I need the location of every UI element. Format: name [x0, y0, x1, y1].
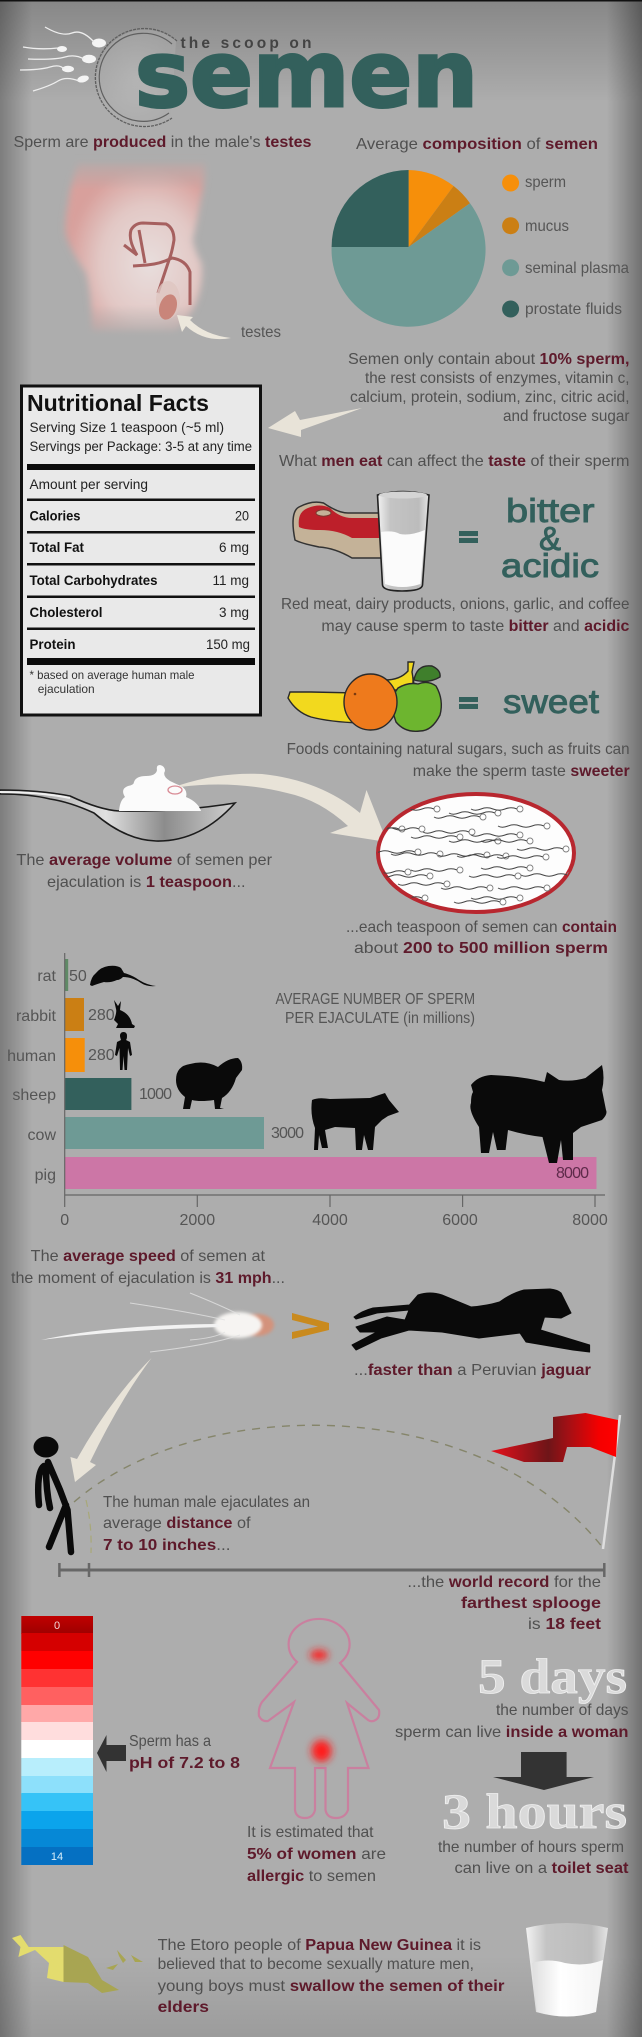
- spoon: [0, 790, 235, 841]
- value labels: 280: [88, 1007, 115, 1024]
- serving info: Servings per Package: 3-5 at any time: [30, 439, 252, 454]
- leaf: [414, 666, 440, 681]
- panel: nutrition facts: [22, 386, 260, 715]
- panel: nutrition facts: Amount per serving: [30, 477, 148, 492]
- row protein: 150 mg: [206, 637, 250, 652]
- pink sperm highlight: [168, 786, 182, 794]
- text: world record: farthest splooge: [461, 1595, 601, 1612]
- icon: red flag: [491, 1413, 620, 1549]
- pie legend: seminal plasma: [525, 260, 629, 277]
- nutrition title: Nutritional Facts: [27, 390, 209, 416]
- label: bitter and acidic: bitter: [506, 492, 594, 529]
- text: average speed: the moment of ejaculation is 31 mph...: [11, 1270, 285, 1287]
- text: semen only contains 10%: the rest consists of enzymes, vitamin c,: [365, 370, 630, 387]
- icon: rabbit: [114, 1000, 135, 1028]
- category labels: rabbit: [16, 1008, 57, 1025]
- row cholesterol: [30, 605, 249, 620]
- row cholesterol: 3 mg: [219, 605, 249, 620]
- text: semen only contains 10%: calcium, protein, sodium, zinc, citric acid,: [350, 389, 630, 406]
- icon: egg ring: [95, 29, 177, 127]
- orange: [344, 674, 397, 730]
- text: average speed: The average speed of semen at: [31, 1248, 266, 1265]
- icon: woman outline: [259, 1619, 379, 1818]
- text: 5% of women: allergic to semen: [247, 1868, 376, 1885]
- axis tick labels: 2000: [180, 1212, 215, 1229]
- pie legend: sperm: [525, 174, 566, 191]
- axis tick labels: 4000: [312, 1212, 348, 1229]
- text: 5% of women: 5% of women are: [247, 1846, 386, 1863]
- testis: [156, 292, 180, 322]
- row total fat: Total Fat: [30, 540, 84, 555]
- row protein: Protein: [30, 637, 76, 652]
- label: bitter and acidic: [501, 492, 599, 584]
- pH scale: [21, 1616, 93, 1865]
- value labels: 280: [88, 1047, 115, 1064]
- chart title: AVERAGE NUMBER OF SPERM: [276, 991, 475, 1008]
- arrow: spoon to lens: [180, 774, 387, 842]
- text: human male distance: [103, 1494, 310, 1554]
- scale end labels: 0: [54, 1620, 60, 1632]
- text: foods containing sugars: Foods containing natural sugars, such as fruits can: [287, 741, 630, 758]
- arrow down: [493, 1752, 594, 1790]
- body silhouette: [65, 162, 205, 332]
- scale end labels: [51, 1620, 63, 1863]
- label: sweet: sweet: [503, 683, 599, 720]
- text: average volume: ejaculation is 1 teaspoon...: [47, 874, 246, 891]
- title: the scoop on semen: [20, 21, 478, 128]
- trajectory arc: [74, 1425, 603, 1553]
- reproductive tubes: [124, 223, 190, 305]
- row calories: 20: [235, 508, 249, 524]
- stat: 5 days: the number of days: [496, 1702, 628, 1719]
- text: world record: is 18 feet: [528, 1616, 602, 1633]
- text: foods containing sugars: make the sperm taste sweeter: [413, 763, 630, 780]
- stat: 3 hours: [438, 1783, 629, 1877]
- text: semen only contains 10%: Semen only contain about 10% sperm,: [348, 351, 630, 368]
- text: average speed: [11, 1248, 285, 1287]
- icon: jaguar: [352, 1289, 590, 1352]
- scale end labels: 14: [51, 1851, 63, 1863]
- footnote: * based on average human male: [30, 668, 195, 682]
- text: average volume: The average volume of semen per: [16, 852, 273, 869]
- arrow: down to man: [70, 1358, 152, 1482]
- stat: 5 days: 5 days: [478, 1648, 627, 1704]
- axis tick labels: 6000: [442, 1212, 478, 1229]
- text: 5% of women: [247, 1824, 386, 1885]
- row calories: Calories: [30, 508, 80, 524]
- text: 5% of women: It is estimated that: [247, 1824, 374, 1841]
- text: pH of sperm: [129, 1733, 240, 1772]
- text: pH of sperm: pH of 7.2 to 8: [129, 1755, 240, 1772]
- text: Etoro people: believed that to become sexually mature men,: [158, 1956, 474, 1973]
- footnote: ejaculation: [38, 682, 95, 696]
- icon: swimming sperm: [20, 27, 106, 91]
- icon: stick man: [34, 1436, 71, 1552]
- footnote: [30, 668, 195, 696]
- icon: pig: [470, 1065, 606, 1163]
- serving info: [30, 420, 252, 454]
- title word semen: semen: [135, 21, 478, 128]
- category labels: [7, 968, 57, 1184]
- label: bitter and acidic: &: [539, 520, 561, 557]
- text: world record: [407, 1574, 602, 1633]
- text: Etoro people: elders: [158, 1999, 209, 2016]
- value labels: 50: [69, 968, 87, 985]
- text: red meat: may cause sperm to taste bitter and acidic: [321, 618, 630, 635]
- row protein: [30, 637, 250, 652]
- text: red meat: Red meat, dairy products, onions, garlic, and coffee: [281, 596, 630, 613]
- icon: sheep: [176, 1058, 242, 1109]
- icon: spoon with semen: [0, 765, 235, 841]
- axes: [65, 953, 605, 1207]
- heading: sperm produced: Sperm are produced in the male's testes: [14, 134, 312, 151]
- icon: fruit: [288, 662, 441, 731]
- row total fat: 6 mg: [219, 540, 249, 555]
- text: Etoro people: [158, 1937, 504, 2016]
- text: world record: ...the world record for the: [407, 1574, 601, 1591]
- text: red meat: [281, 596, 630, 635]
- text: faster than jaguar: ...faster than a Peruvian jaguar: [354, 1362, 591, 1379]
- heading: average composition: Average composition of semen: [356, 136, 598, 153]
- text: human male distance: The human male ejaculates an: [103, 1494, 310, 1511]
- greater-than sign: [292, 1313, 329, 1339]
- equals sign bitter: [459, 531, 478, 543]
- icon: magnified sperm lens: [353, 794, 574, 912]
- value labels: 1000: [139, 1086, 172, 1103]
- text: foods containing sugars: [287, 741, 630, 780]
- axis tick labels: 8000: [572, 1212, 608, 1229]
- arrow to pH: [97, 1735, 126, 1772]
- icon: human: [115, 1032, 132, 1070]
- whipped dollop: [119, 765, 201, 811]
- bar chart: sperm per ejaculate: [7, 953, 608, 1229]
- heading: what men eat: What men eat can affect the taste of their sperm: [279, 453, 630, 470]
- label testes: testes: [241, 324, 281, 341]
- text: each teaspoon contains: about 200 to 500 million sperm: [354, 940, 608, 957]
- icon: rat: [90, 966, 156, 986]
- row carbohydrates: Total Carbohydrates: [30, 573, 158, 588]
- serving info: Serving Size 1 teaspoon (~5 ml): [30, 420, 224, 435]
- illustration: male anatomy: [50, 155, 281, 341]
- label: bitter and acidic: acidic: [501, 547, 599, 584]
- row carbohydrates: [30, 573, 249, 588]
- row calories: [30, 508, 249, 524]
- text: Etoro people: young boys must swallow the semen of their: [158, 1978, 504, 1995]
- icon: cow: [311, 1093, 399, 1150]
- chart title: [276, 991, 475, 1027]
- chart title: PER EJACULATE (in millions): [285, 1010, 475, 1027]
- text: semen only contains 10%: [348, 351, 630, 425]
- stat: 5 days: [395, 1648, 628, 1741]
- axis tick labels: [60, 1212, 608, 1229]
- allergic reaction spots: [310, 1650, 332, 1762]
- text: semen only contains 10%: and fructose sugar: [503, 408, 630, 425]
- apple: [392, 682, 441, 731]
- category labels: rat: [37, 968, 57, 985]
- value labels: [69, 968, 589, 1182]
- stat: 3 hours: 3 hours: [442, 1783, 627, 1839]
- distance ruler: [59, 1563, 604, 1577]
- icon: steak: [293, 502, 385, 558]
- icon: glass of semen: [526, 1923, 608, 2016]
- axis tick labels: 0: [60, 1212, 69, 1229]
- bars: [65, 959, 596, 1189]
- pie legend: prostate fluids: [525, 301, 622, 318]
- text: human male distance: average distance of: [103, 1515, 251, 1532]
- row total fat: [30, 540, 249, 555]
- banana: [288, 662, 415, 723]
- arrow to nutrition label: [268, 408, 362, 437]
- scrotum: [156, 281, 180, 319]
- stat: 3 hours: the number of hours sperm: [438, 1839, 624, 1856]
- pie legend: mucus: [525, 218, 569, 235]
- category labels: human: [7, 1048, 56, 1065]
- icon: speeding droplet: [41, 1293, 274, 1352]
- text: Etoro people: The Etoro people of Papua New Guinea it is: [158, 1937, 481, 1954]
- text: each teaspoon contains: ...each teaspoon of semen can contain: [346, 919, 617, 936]
- category labels: cow: [28, 1127, 56, 1144]
- text: pH of sperm: Sperm has a: [129, 1733, 211, 1750]
- category labels: pig: [35, 1167, 56, 1184]
- row carbohydrates: 11 mg: [212, 573, 249, 588]
- value labels: 3000: [271, 1125, 304, 1142]
- pie legend: [502, 174, 629, 318]
- icon: map of Papua New Guinea: [12, 1935, 143, 1993]
- stat: 3 hours: can live on a toilet seat: [454, 1860, 629, 1877]
- text: each teaspoon contains: [346, 919, 617, 957]
- icon: glass of milk: [378, 492, 429, 591]
- stat: 5 days: sperm can live inside a woman: [395, 1724, 628, 1741]
- category labels: sheep: [12, 1087, 56, 1104]
- text: average volume: [16, 852, 273, 891]
- pie chart: composition: [332, 170, 486, 327]
- equals sign sweet: [459, 697, 478, 709]
- row cholesterol: Cholesterol: [30, 605, 102, 620]
- value labels: 8000: [556, 1165, 589, 1182]
- title line small: the scoop on: [180, 35, 312, 52]
- text: human male distance: 7 to 10 inches ...: [103, 1537, 231, 1554]
- arrow to testes: [177, 315, 231, 339]
